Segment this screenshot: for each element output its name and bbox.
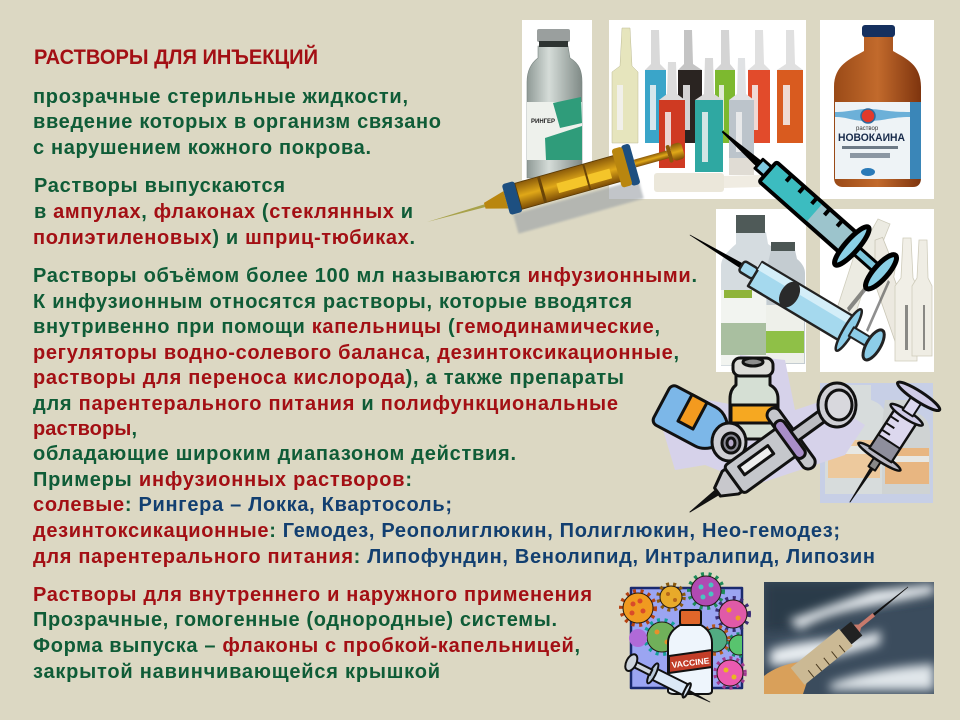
grey syringe (669, 386, 845, 541)
text block: infusion solutions (33, 265, 697, 465)
image: Ringer glass bottle (522, 20, 592, 180)
text block: infusion solutions: обладающие широким диапазоном действия. (33, 443, 516, 465)
text block: infusion examples (33, 469, 875, 568)
text block: infusion solutions: К инфузионным относятся растворы, которые вводятся (33, 291, 632, 313)
icon: vials and syringe clip art (651, 355, 865, 541)
front row of ampoules (654, 58, 760, 192)
ring lid (818, 383, 856, 427)
text block: infusion examples: дезинтоксикационные: Гемодез, Реополиглюкин, Полиглюкин, Нео-гемодез; (33, 520, 840, 542)
text block: release forms: в ампулах, флаконах (стеклянных и (34, 201, 413, 223)
text block: infusion solutions: внутривенно при помощи капельницы (гемодинамические, (33, 316, 660, 338)
image: Novocaine bottle (820, 20, 934, 199)
back row of ampoules (612, 28, 803, 143)
icon: gold syringe (421, 130, 693, 257)
lavender halo (660, 355, 865, 485)
text block: release forms: полиэтиленовых) и шприц-тюбиках. (33, 227, 415, 249)
text block: infusion solutions: регуляторы водно-солевого баланса, дезинтоксикационные, (33, 342, 679, 364)
grey rubber cap (712, 423, 746, 461)
text block: infusion examples: для парентерального питания: Липофундин, Венолипид, Интралипид, Липозин (33, 546, 875, 568)
vaccine bottle: VACCINE (671, 655, 710, 670)
text block: infusion solutions: растворы для переноса кислорода), а также препараты (33, 367, 624, 389)
image: vaccine clip art (621, 574, 750, 712)
icon: lavender syringe (829, 379, 942, 516)
vaccine syringe (622, 651, 715, 712)
text block: definition: введение которых в организм связано (33, 111, 441, 133)
text block: definition (33, 86, 441, 159)
image: Ringer glass bottle: РИНГЕР (531, 119, 555, 125)
image: Novocaine bottle: раствор (856, 126, 879, 132)
text block: infusion examples: Примеры инфузионных растворов: (33, 469, 412, 491)
icon: light blue syringe (678, 214, 892, 369)
image: syringe photograph (764, 578, 934, 694)
upright vial (730, 358, 778, 439)
text block: infusion solutions: растворы, (33, 418, 137, 440)
hand (764, 662, 807, 694)
text block: release forms (33, 175, 415, 249)
text block: internal and external solutions (33, 584, 592, 683)
viruses (621, 574, 750, 688)
image: infusion bottles (716, 209, 806, 372)
text block: release forms: Растворы выпускаются (34, 175, 285, 197)
text block: internal and external solutions: Прозрачные, гомогенные (однородные) системы. (33, 609, 557, 631)
icon: teal syringe (706, 113, 903, 295)
image: Novocaine bottle: НОВОКАИНА (838, 132, 905, 144)
text block: internal and external solutions: Форма выпуска – флаконы с пробкой-капельницей, (33, 635, 580, 657)
photographed syringe (790, 586, 908, 685)
title: РАСТВОРЫ ДЛЯ ИНЪЕКЦИЙ (34, 45, 318, 69)
text block: internal and external solutions: Растворы для внутреннего и наружного применения (33, 584, 592, 606)
image: vials with orange labels (820, 383, 933, 503)
text block: definition: прозрачные стерильные жидкости, (33, 86, 408, 108)
text block: infusion examples: солевые: Рингера – Локка, Квартосоль; (33, 494, 452, 516)
text block: infusion solutions: для парентерального питания и полифункциональные (33, 393, 618, 415)
text block: infusion solutions: Растворы объёмом более 100 мл называются инфузионными. (33, 265, 697, 287)
text block: definition: с нарушением кожного покрова. (33, 137, 371, 159)
image: coloured ampoules (609, 20, 806, 199)
image: glass ampoules (820, 209, 934, 372)
lying blue vial (651, 384, 738, 458)
text block: internal and external solutions: закрытой навинчивающейся крышкой (33, 661, 440, 683)
